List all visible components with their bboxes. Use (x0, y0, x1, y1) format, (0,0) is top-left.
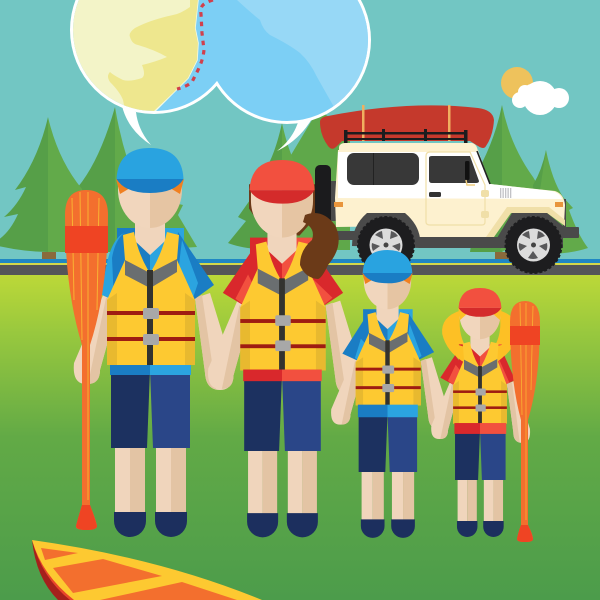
shirt hem (110, 365, 191, 375)
face (460, 307, 500, 339)
shorts (111, 370, 190, 448)
face (118, 178, 182, 228)
shoes (114, 512, 187, 537)
cap (250, 160, 314, 204)
jeep with canoe (315, 105, 579, 273)
hair back (249, 184, 315, 236)
rear window (347, 153, 419, 185)
legs (115, 438, 186, 514)
shoes (361, 519, 415, 538)
cloud (512, 81, 569, 115)
legs (248, 441, 317, 515)
neck (470, 334, 490, 356)
shirt hem (454, 423, 506, 434)
wheel arches (352, 213, 563, 248)
arms (331, 357, 449, 429)
arms (208, 301, 363, 395)
kayak (32, 540, 262, 600)
shorts (359, 414, 417, 472)
shorts (244, 375, 321, 451)
left paddle (65, 190, 108, 530)
shirt torso (363, 309, 413, 409)
sun (501, 67, 533, 99)
pigtail fronts (450, 342, 510, 362)
door hinges (481, 190, 489, 218)
body lower cream (335, 150, 565, 237)
door window (429, 156, 479, 183)
sleeves (440, 353, 515, 385)
trees left (0, 107, 197, 262)
shirt torso (250, 238, 315, 373)
body white band (336, 152, 562, 199)
girl (431, 288, 530, 537)
canoe straps (362, 105, 450, 141)
dotted route (177, 0, 213, 89)
trees right (470, 105, 588, 262)
front wheel (506, 217, 562, 273)
shirt torso (459, 344, 502, 426)
cap (459, 288, 501, 317)
grass ground (0, 275, 600, 600)
neck (267, 230, 297, 264)
pigtails (442, 310, 518, 362)
map speech bubbles (60, 0, 380, 151)
running board (418, 237, 500, 248)
shirt hem (358, 405, 418, 417)
rear wheel (358, 217, 414, 273)
spare tire (315, 165, 331, 235)
ponytail (300, 213, 339, 279)
neck (135, 220, 165, 255)
sleeves (102, 232, 214, 301)
mirror (465, 161, 475, 185)
shirt torso (117, 228, 184, 368)
cap (363, 250, 412, 283)
bubble outline (70, 0, 371, 124)
windshield (477, 151, 490, 184)
arms (431, 381, 530, 443)
mother (208, 160, 363, 537)
hair (362, 273, 413, 284)
life vest (453, 342, 507, 424)
life vest (356, 312, 421, 405)
roof (339, 143, 478, 152)
father (74, 148, 233, 537)
shorts (455, 430, 506, 480)
hood vent (500, 188, 511, 198)
hair (116, 179, 184, 194)
shoes (457, 521, 504, 537)
roof rack (344, 129, 468, 143)
legs (458, 474, 503, 522)
shirt hem (243, 370, 322, 381)
map content (73, 0, 368, 121)
door handle (429, 192, 441, 197)
trees behind mother (228, 110, 350, 250)
arms (74, 293, 233, 390)
door outline (426, 152, 485, 225)
boy (331, 250, 449, 538)
face (251, 189, 313, 238)
cap (116, 148, 184, 193)
sleeves (223, 242, 343, 308)
neck (376, 303, 399, 329)
front bumper (562, 199, 579, 238)
life vest (107, 232, 195, 365)
bubble tails (122, 106, 313, 151)
life vest (240, 241, 326, 370)
right paddle (510, 301, 540, 542)
sleeves (342, 313, 434, 362)
road (0, 259, 600, 275)
canoe (320, 105, 494, 149)
shoes (247, 513, 318, 537)
legs (362, 465, 414, 521)
hair (458, 308, 502, 320)
rear bumper (336, 231, 356, 240)
face (364, 272, 411, 309)
lights (334, 202, 563, 207)
fender stripe (486, 207, 565, 237)
